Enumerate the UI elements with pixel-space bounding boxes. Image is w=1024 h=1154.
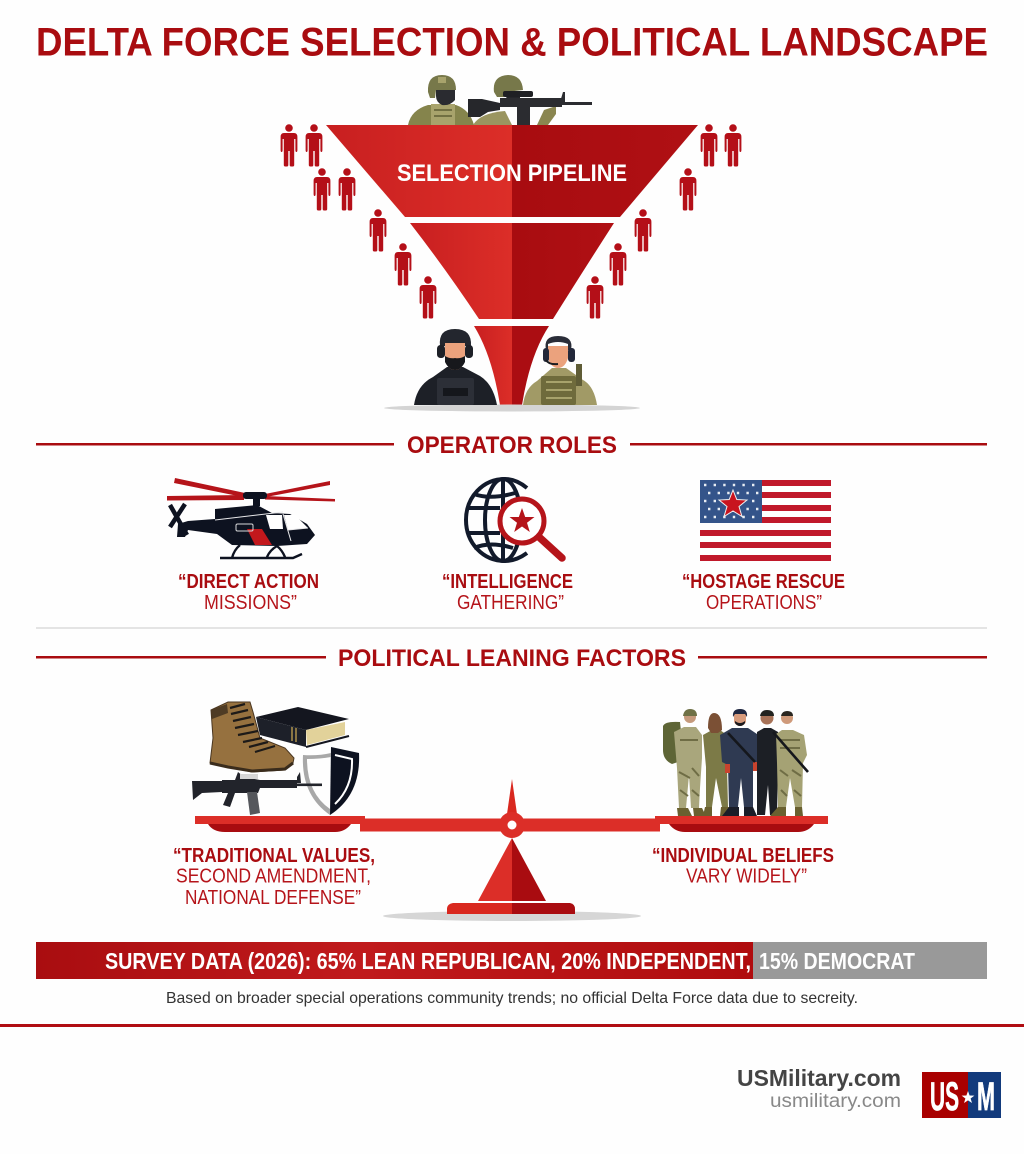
label xyxy=(442,570,573,614)
funnel bottom tier xyxy=(474,326,549,405)
label: “HOSTAGE RESCUE xyxy=(682,570,845,593)
label: individual beliefs: VARY WIDELY” xyxy=(686,864,807,888)
label: individual beliefs xyxy=(652,844,834,888)
operator in black gear xyxy=(414,329,497,405)
survey data bar: SURVEY DATA (2026): 65% LEAN REPUBLICAN, 20% INDEPENDENT, xyxy=(105,948,751,974)
panel: selection pipeline funnel xyxy=(281,75,741,412)
service member 3 xyxy=(720,709,760,816)
panel: hostage rescue operations xyxy=(682,480,845,614)
service member 2 xyxy=(703,713,729,816)
service member 5 xyxy=(770,711,807,816)
survey data bar: 15% DEMOCRAT xyxy=(759,948,915,974)
label: traditional values: SECOND AMENDMENT, xyxy=(176,864,371,888)
service member 1 xyxy=(674,709,706,816)
icon: rifle xyxy=(192,772,322,815)
survey data bar xyxy=(36,942,987,979)
funnel top tier xyxy=(326,125,698,217)
rifles xyxy=(728,732,808,772)
section heading: operator roles: OPERATOR ROLES xyxy=(407,432,617,459)
icon: boot xyxy=(210,702,294,772)
label: traditional values: NATIONAL DEFENSE” xyxy=(185,886,361,909)
panel: direct action missions xyxy=(167,478,335,614)
scale base shadow xyxy=(383,911,641,921)
label: traditional values xyxy=(173,844,375,909)
label xyxy=(682,570,845,614)
icon: globe with magnifier xyxy=(466,479,562,561)
soldiers above the funnel xyxy=(408,75,592,125)
footer brand text: USMilitary.com xyxy=(737,1065,901,1091)
operator in camouflage gear xyxy=(523,336,597,405)
label: “DIRECT ACTION xyxy=(178,570,319,593)
icon: helicopter xyxy=(167,478,335,558)
label: “INTELLIGENCE xyxy=(442,570,573,593)
footnote: Based on broader special operations community trends; no official Delta Force data due to secreity. xyxy=(166,990,858,1007)
icon: shield xyxy=(303,747,359,815)
ground shadow xyxy=(384,404,640,412)
icon: diverse group of service members xyxy=(663,709,808,816)
footer logo: M xyxy=(977,1075,995,1119)
backpack xyxy=(663,722,684,764)
label: GATHERING” xyxy=(457,591,564,614)
footer brand text: usmilitary.com xyxy=(770,1091,901,1112)
service member 4 xyxy=(757,710,778,815)
label: individual beliefs: “INDIVIDUAL BELIEFS xyxy=(652,844,834,867)
icon: flag xyxy=(700,480,831,561)
label: OPERATIONS” xyxy=(706,591,822,614)
section heading: political leaning factors: POLITICAL LEANING FACTORS xyxy=(338,645,686,672)
panel: intelligence gathering xyxy=(442,479,573,614)
label xyxy=(178,570,319,614)
icon: book xyxy=(256,707,349,747)
scale beam xyxy=(195,779,828,838)
panel: balance scale xyxy=(192,702,828,921)
label: traditional values: “TRADITIONAL VALUES, xyxy=(173,844,375,867)
candidate figures right xyxy=(587,124,741,318)
label: MISSIONS” xyxy=(204,591,297,614)
funnel label: SELECTION PIPELINE xyxy=(397,160,627,187)
funnel middle tier xyxy=(410,223,614,319)
footer brand text xyxy=(737,1065,901,1112)
footer logo: US xyxy=(930,1075,959,1119)
footer logo xyxy=(922,1072,1001,1119)
scale base xyxy=(447,838,575,914)
candidate figures left xyxy=(281,124,436,318)
